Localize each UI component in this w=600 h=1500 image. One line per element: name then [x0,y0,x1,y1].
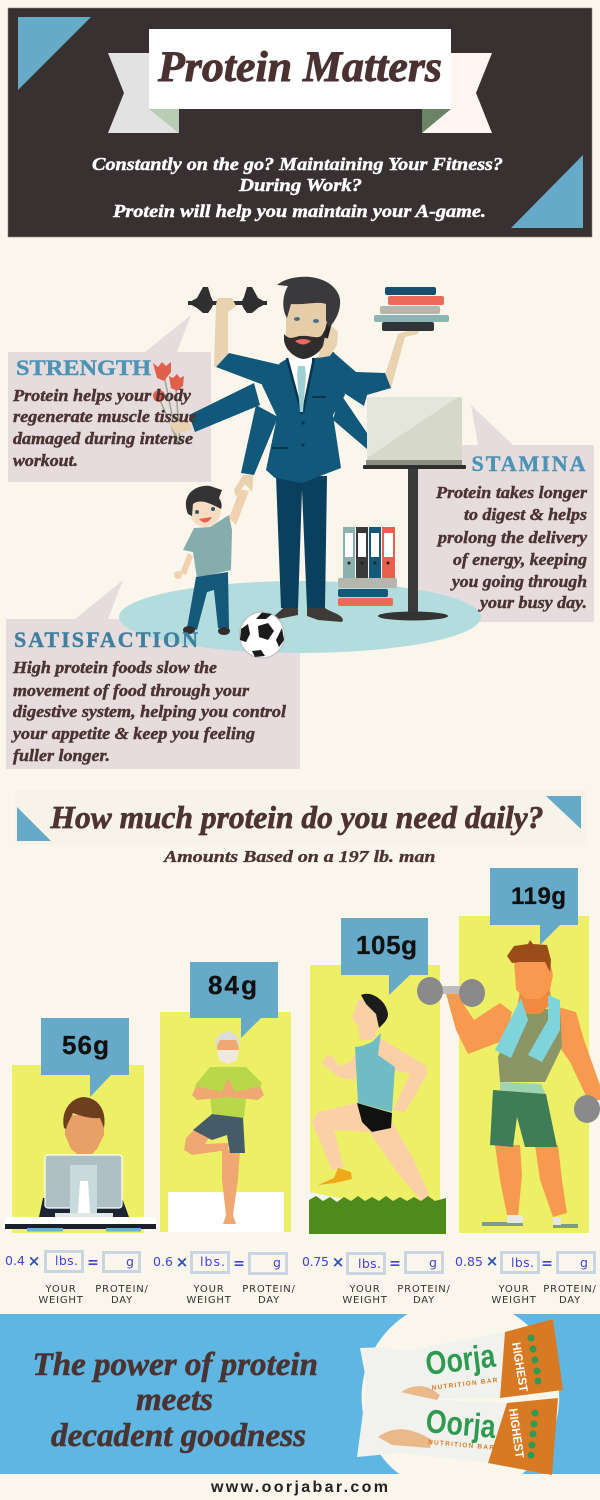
bubble: 84g [190,962,278,1038]
chart bar: 84g [160,962,291,1232]
lifter legs [495,1145,567,1217]
ribbon: right tail [422,53,492,133]
formula: 0.4: YOUR [45,1284,76,1295]
panel: header [8,8,592,237]
ribbon: left tail [108,53,179,133]
top bar badges [528,1334,542,1384]
text: strength: STRENGTH [16,355,151,380]
formula: 0.6: g [273,1255,281,1270]
subtitle: Constantly on the go? Maintaining Your Fitness? [92,154,503,174]
beard [284,326,327,359]
bubble: 56g [41,1018,129,1097]
runner shorts [357,1103,392,1132]
formula: 0.6: lbs. [200,1254,225,1269]
text: stamina: you going through [450,572,587,591]
lifter neck [518,990,552,1014]
formula: 0.75: 0.75 [302,1254,329,1269]
product: bottom bar: HIGHEST [506,1407,527,1460]
formula: 0.85: = [541,1256,553,1272]
formula: 0.6: = [233,1256,245,1272]
product: top bar: NUTRITION BAR [431,1377,498,1392]
icon: football [240,612,284,658]
promo text [32,1347,318,1454]
hanging arm right [333,393,367,449]
formula: 0.75 [302,1252,451,1306]
bottom bar brand: Oorja [424,1402,498,1445]
boy shirt [183,515,232,578]
table pole [408,469,418,614]
value: 56g: 56g [62,1030,109,1060]
formula: 0.75: YOUR [349,1284,380,1295]
formula: 0.4: PROTEIN/ [95,1284,149,1295]
formula: 0.85: YOUR [498,1284,529,1295]
heading triangle right [546,796,581,829]
text: strength: workout. [13,451,78,470]
circle behind product [362,1314,559,1474]
title banner [149,29,451,109]
text: satisfaction: fuller longer. [13,746,110,765]
promo text: The power of protein [32,1347,318,1383]
sleeve raised right [325,352,391,406]
trousers [276,476,327,608]
illustration: boy [174,486,249,635]
text: satisfaction: movement of food through your [13,681,249,700]
text: stamina: your busy day. [478,593,587,612]
formula: 0.75: lbs. [358,1256,381,1271]
text: stamina: Protein takes longer [435,483,587,502]
runner rear arm [375,1035,427,1112]
laptop screen [367,397,462,460]
table foot [378,612,448,620]
formula: 0.85: × [486,1252,498,1270]
raised forearm right [385,330,419,388]
runner rear leg [368,1122,432,1204]
text: strength [12,355,197,470]
illustration: flowers [153,362,191,445]
laptop [45,1155,122,1208]
callout box: strength [8,315,211,482]
worker hair [63,1097,105,1129]
formula: 0.6: 0.6 [153,1254,173,1269]
dumbbell raised [417,977,485,1007]
raised forearm left [214,298,236,368]
floor ellipse [119,581,481,653]
text: satisfaction: your appetite & keep you feeling [11,724,256,743]
formula: 0.75: = [389,1256,401,1272]
callout box: stamina [418,405,594,622]
promo text: decadent goodness [51,1418,306,1454]
yoga shorts [193,1114,245,1153]
text: satisfaction: High protein foods slow the [12,658,217,677]
formula: 0.75: WEIGHT [342,1295,388,1306]
lifter hair [507,940,551,972]
shirt [288,358,312,412]
illustration: binders and books [338,527,397,606]
formula: 0.4: lbs. [55,1253,78,1268]
product: bottom bar [357,1382,558,1475]
lifter shorts [490,1090,557,1147]
product: top bar: HIGHEST [509,1341,531,1393]
ribbon: left fold [149,109,179,133]
formula: 0.4: 0.4 [5,1253,25,1268]
table top [363,465,466,469]
mouth [295,339,311,344]
boy face [189,493,221,527]
subheading: Amounts Based on a 197 lb. man [163,847,436,866]
chart bar: 105g [300,918,446,1234]
text: satisfaction: SATISFACTION [14,627,198,652]
ribbon: right fold [422,109,451,133]
formula: 0.6: DAY [258,1295,280,1306]
desk [5,1217,156,1224]
text: stamina [435,451,588,612]
footer url: www.oorjabar.com [210,1479,388,1496]
callout box: satisfaction [6,580,300,769]
lifter waistband [500,1082,547,1097]
jacket [262,352,345,483]
yoga standing leg [222,1150,240,1224]
text: stamina: of energy, keeping [453,550,588,569]
text: satisfaction: digestive system, helping you control [13,702,286,721]
illustration: runner [300,994,446,1234]
corner triangle: bottom right [511,155,583,228]
subtitle [92,154,503,221]
lifter shoes [482,1222,523,1226]
product: top bar [360,1319,563,1402]
promo text: meets [136,1382,213,1418]
formula: 0.4 [5,1252,149,1306]
value: 84g: 84g [208,970,257,1000]
grass [309,1196,446,1234]
pockets and buttons [272,396,326,449]
text: stamina: prolong the delivery [436,528,587,547]
runner front arm [321,1050,358,1080]
yoga head [217,1032,239,1060]
formula: 0.85: g [580,1255,588,1270]
tie [297,366,306,412]
formula: 0.75: PROTEIN/ [397,1284,451,1295]
section heading [15,790,586,866]
worker face [65,1115,104,1154]
illustration: weightlifter [417,940,600,1228]
arm toward flowers [189,383,260,432]
runner head [352,1000,378,1040]
runner front leg [312,1102,370,1170]
value: 105g: 105g [356,930,417,960]
formula: 0.85: PROTEIN/ [543,1284,597,1295]
illustration: yoga man [184,1032,264,1224]
boy hair [186,486,222,516]
boy arm up [229,489,249,525]
dumbbell [188,287,267,313]
illustration: multitasking man [188,277,449,622]
illustration: desk with laptop [363,397,466,620]
lifter tank [498,1007,562,1082]
head [286,302,328,354]
formula: 0.6: PROTEIN/ [242,1284,296,1295]
hanging arm left and hand [241,405,278,475]
product: bottom bar: NUTRITION BAR [428,1439,494,1452]
text: strength: Protein helps your body [12,386,191,405]
white mat [168,1192,284,1232]
top bar almonds [400,1386,440,1402]
shoes [273,608,343,622]
yoga bent leg [184,1128,229,1155]
formula: 0.85: lbs. [511,1255,534,1270]
illustration: office worker [5,1097,156,1232]
formula: 0.6: × [176,1253,188,1271]
formula: 0.75: × [332,1253,344,1271]
chart bar: 119g [417,868,600,1233]
stack of books [374,287,449,331]
heading text: How much protein do you need daily? [50,799,544,835]
subtitle: During Work? [238,175,362,195]
formula: 0.4: WEIGHT [38,1295,84,1306]
bottom bar badges [528,1410,538,1458]
text: stamina: to digest & helps [464,505,587,524]
chart bar: 56g [5,1018,156,1233]
formula: 0.85: 0.85 [455,1254,483,1269]
lifter curling arm [445,988,512,1054]
formula: 0.4: DAY [111,1295,133,1306]
formula: 0.4: × [28,1252,40,1270]
corner triangle: top left [18,17,91,90]
sleeve raised left [216,353,290,395]
formula: 0.85: DAY [559,1295,581,1306]
panel: promo band [0,1314,600,1475]
formula: 0.6: WEIGHT [186,1295,232,1306]
hand and phone [318,326,338,358]
bubble: 105g [341,918,428,995]
bubble: 119g [490,868,578,945]
formula: 0.85: WEIGHT [491,1295,537,1306]
title: Protein Matters [157,44,442,91]
value: 119g: 119g [511,883,566,910]
runner hair [361,994,388,1028]
formula: 0.6: YOUR [193,1284,224,1295]
formula: 0.75: DAY [413,1295,435,1306]
runner tank [355,1033,395,1112]
formula: 0.6 [153,1252,296,1306]
eyes [294,317,319,323]
formula: 0.85 [455,1252,597,1306]
boy shoes [183,626,195,634]
text: strength: regenerate muscle tissue [13,407,197,426]
text: satisfaction [11,627,286,765]
lapels [287,358,314,414]
subtitle: Protein will help you maintain your A-game. [112,201,486,221]
dumbbell lowered [574,1095,600,1123]
boy arm down [180,553,193,575]
text: strength: damaged during intense [13,429,193,448]
runner shoe [318,1168,352,1185]
laptop base [366,460,462,465]
lifter head [514,957,553,999]
white grass patch [300,1190,345,1207]
formula: 0.4: g [126,1254,134,1269]
yoga shirt [195,1067,262,1118]
formula: 0.4: = [87,1255,99,1271]
yoga arms [192,1078,264,1100]
hair [277,277,340,328]
boy trousers [187,572,229,630]
text: stamina: STAMINA [472,451,586,476]
heading triangle left [17,807,51,841]
formula: 0.75: g [429,1255,437,1270]
lifter other arm [555,1006,600,1100]
top bar brand: Oorja [423,1337,498,1382]
bottom bar almonds [378,1429,432,1448]
worker body [39,1198,129,1217]
towel [495,995,560,1062]
